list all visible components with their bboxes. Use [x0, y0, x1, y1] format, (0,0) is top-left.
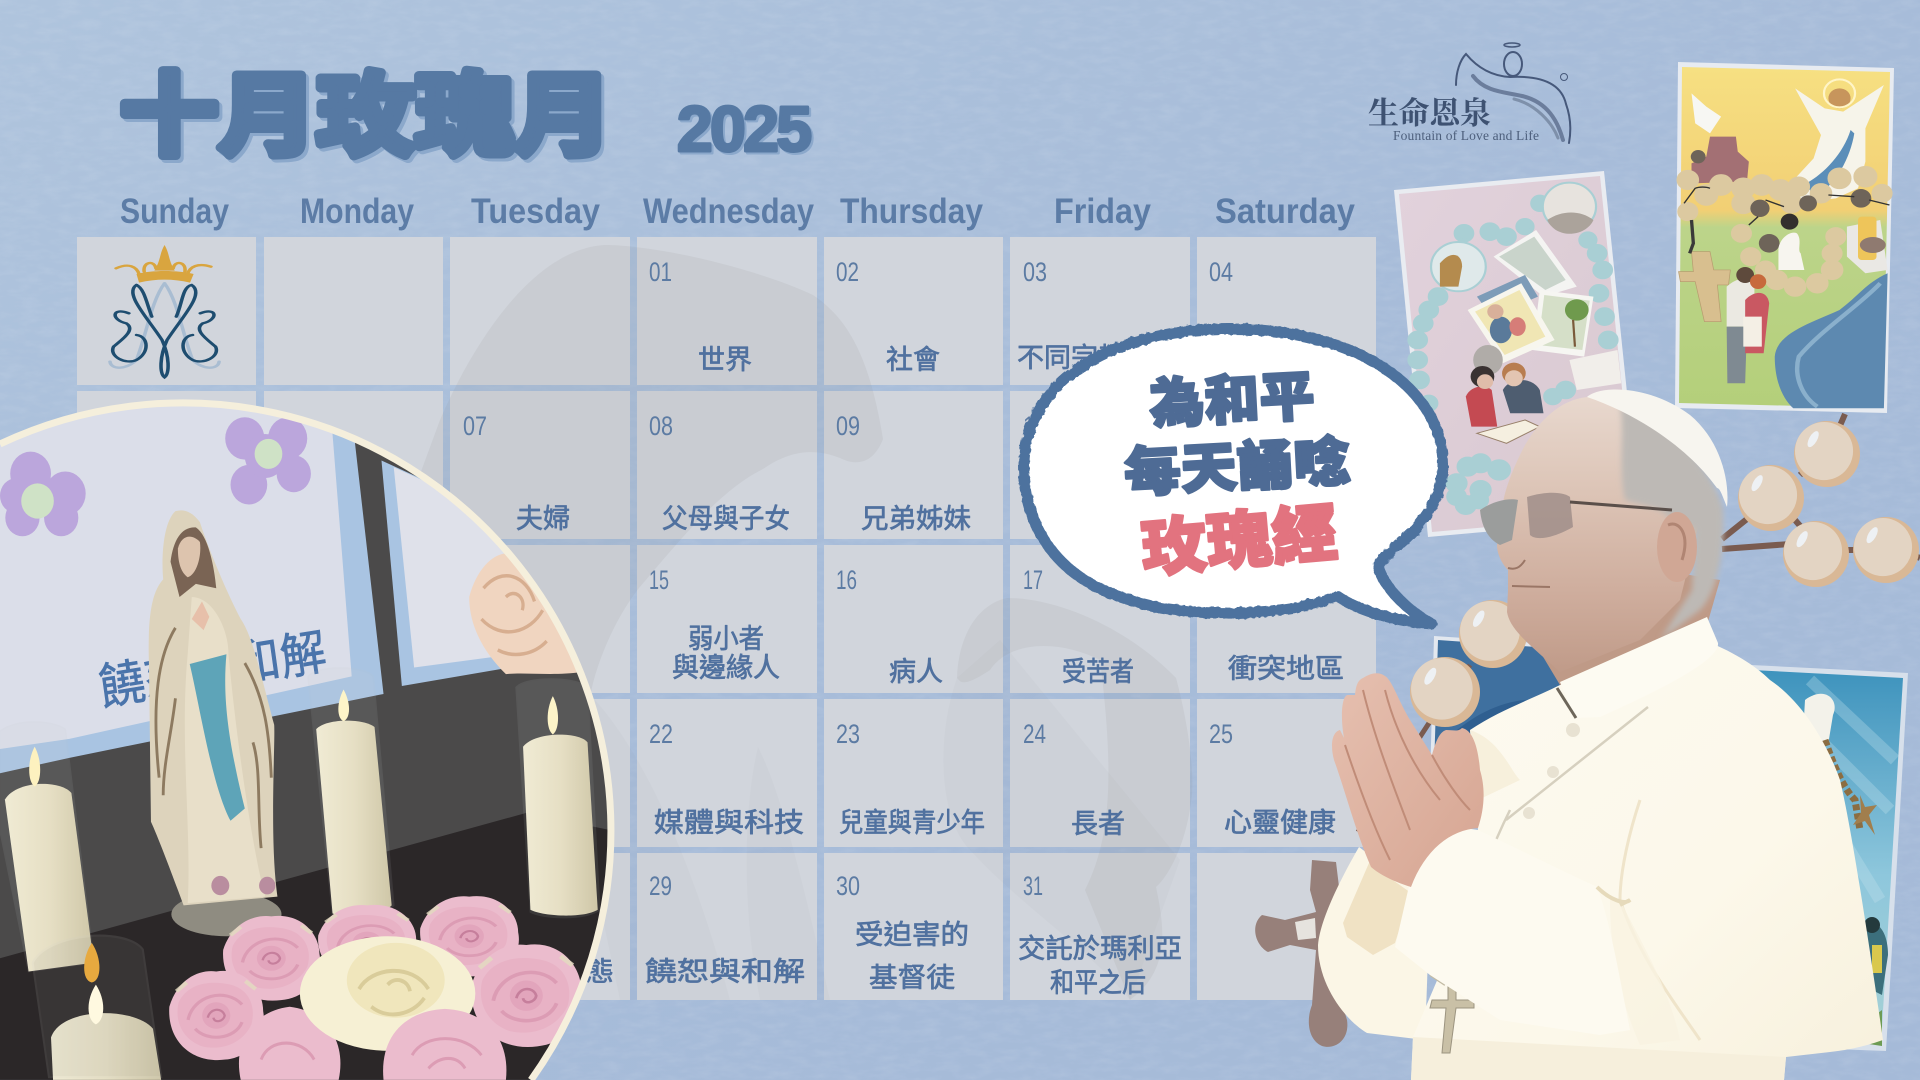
cell 15 弱小者與邊緣人: 與邊緣人 [672, 646, 780, 685]
watermark silhouette behind calendar [300, 245, 1192, 1000]
title: 十月玫瑰月: 十月玫瑰月 [123, 46, 615, 176]
weekday headers: Tuesday [471, 192, 600, 231]
weekday headers: Saturday [1215, 192, 1355, 231]
far sleeve [1318, 847, 1430, 1040]
cell 15 弱小者與邊緣人: 弱小者 [688, 617, 764, 656]
cell 25 心靈健康: 心靈健康 [1224, 801, 1336, 840]
cell 16 病人 [836, 565, 943, 689]
cell 15 弱小者與邊緣人 [649, 565, 780, 685]
pope figure praying [1318, 390, 1883, 1080]
hair [1620, 405, 1723, 640]
speech bubble: 為和平每天誦唸玫瑰經 [1024, 329, 1443, 624]
cell 16 病人: 病人 [889, 650, 943, 689]
cell 31 交託於瑪利亞和平之后: 交託於瑪利亞 [1018, 927, 1182, 966]
cell 23 兒童與青少年: 兒童與青少年 [839, 801, 985, 840]
cell 23 兒童與青少年 [836, 719, 985, 840]
cell 08 父母與子女: 父母與子女 [662, 497, 790, 536]
weekday headers: Sunday [120, 192, 229, 231]
cell 01 世界: 01 [649, 257, 672, 287]
cell 03 不同宗教: 不同宗教 [1017, 336, 1125, 375]
glass candle foreground [33, 936, 161, 1080]
statue of Our Lady [149, 510, 282, 936]
cell 02 社會 [836, 257, 940, 377]
cell 31 交託於瑪利亞和平之后 [1018, 871, 1182, 1000]
weekday headers: Thursday [840, 192, 983, 231]
rosary chain and crucifix near pope [1255, 600, 1527, 1047]
cell 30 受迫害的基督徒: 受迫害的 [855, 913, 969, 952]
cell 31 交託於瑪利亞和平之后: 31 [1023, 871, 1043, 901]
cell 29 饒恕與和解: 29 [649, 871, 672, 901]
cell 07 夫婦: 夫婦 [516, 497, 570, 536]
near sleeve [1395, 829, 1630, 1035]
year 2025: 2025 [677, 93, 812, 165]
weekday headers [120, 192, 1355, 231]
cell 04: 04 [1209, 257, 1233, 287]
rosary bead cluster top right [1722, 414, 1920, 587]
illustration: yellow and green mystery scene [1675, 62, 1894, 413]
glasses [1480, 493, 1672, 545]
cell 07 夫婦 [463, 411, 570, 536]
candle center [308, 668, 394, 918]
illustration: sky rosary and children [1728, 665, 1908, 1051]
title: 十月玫瑰月: 十月玫瑰月 [120, 43, 612, 173]
cell 25 心靈健康: 25 [1209, 719, 1233, 749]
weekday headers: Friday [1054, 192, 1151, 231]
photo circle: Marian statue with candles and roses [0, 390, 612, 1080]
weekday headers: Monday [300, 192, 414, 231]
roses bouquet [169, 896, 582, 1080]
cell 09 兄弟姊妹 [836, 411, 971, 536]
ear [1657, 512, 1697, 582]
cell 25 心靈健康 [1209, 719, 1336, 840]
cell 17 受苦者: 受苦者 [1062, 650, 1134, 689]
cell 08 父母與子女: 08 [649, 411, 673, 441]
cell 03 不同宗教: 03 [1023, 257, 1047, 287]
cell 30 受迫害的基督徒: 基督徒 [869, 956, 955, 995]
bubble line 1: 為和平 [1147, 352, 1316, 439]
cell 02 社會: 社會 [886, 338, 940, 377]
cell 29 饒恕與和解 [645, 871, 805, 989]
candle right [516, 679, 600, 917]
calendar dates and intentions [463, 257, 1344, 1000]
cell 24 長者: 24 [1023, 719, 1046, 749]
cell 衝突地區: 衝突地區 [1228, 647, 1344, 686]
year 2025: 2025 [679, 95, 814, 167]
cell 03 不同宗教 [1017, 257, 1125, 375]
praying hands [1332, 673, 1484, 887]
logo: Fountain of Love and Life: 生命恩泉 [1368, 88, 1491, 133]
cell 22 媒體與科技: 22 [649, 719, 673, 749]
face [1497, 397, 1700, 672]
cell 15 弱小者與邊緣人: 15 [649, 565, 669, 595]
cell 09 兄弟姊妹: 09 [836, 411, 860, 441]
peach rose [469, 553, 583, 674]
cell 24 長者 [1023, 719, 1125, 841]
weekday headers: Wednesday [643, 192, 814, 231]
cell 22 媒體與科技: 媒體與科技 [654, 801, 804, 840]
collar [1557, 617, 1718, 718]
bubble line 3: 玫瑰經 [1137, 483, 1340, 590]
cell 28 生態: 生態 [556, 950, 614, 989]
cell 01 世界 [649, 257, 752, 377]
neck [1533, 560, 1720, 685]
cell 22 媒體與科技 [649, 719, 804, 840]
cell 30 受迫害的基督徒 [836, 871, 969, 995]
cell 16 病人: 16 [836, 565, 857, 595]
calendar monogram: crowned M emblem [110, 245, 219, 377]
logo: Fountain of Love and Life: Fountain of Love and Life [1393, 128, 1539, 143]
logo: Fountain of Love and Life [1368, 43, 1570, 143]
pectoral cross [1430, 975, 1474, 1053]
cell 30 受迫害的基督徒: 30 [836, 871, 860, 901]
watermark lower veil [585, 640, 1180, 1000]
cell 29 饒恕與和解: 饒恕與和解 [645, 950, 805, 989]
cell 07 夫婦: 07 [463, 411, 487, 441]
handwritten paper label: 饒恕與和解 [94, 612, 330, 719]
cell 02 社會: 02 [836, 257, 859, 287]
candle left [0, 746, 92, 972]
cell 24 長者: 長者 [1071, 802, 1125, 841]
calendar grid cells [77, 237, 1376, 1000]
paper flowers [0, 417, 311, 536]
cell 17 受苦者: 17 [1023, 565, 1043, 595]
cell 17 受苦者 [1023, 565, 1134, 689]
cell 10: 10 [1023, 411, 1047, 441]
cell 01 世界: 世界 [698, 338, 752, 377]
cell 23 兒童與青少年: 23 [836, 719, 860, 749]
cape and robe [1411, 640, 1883, 1080]
photo wall [0, 390, 612, 1080]
cell 09 兄弟姊妹: 兄弟姊妹 [861, 497, 971, 536]
bubble line 2: 每天誦唸 [1122, 417, 1352, 508]
illustration: pink rosary with family photos [1394, 171, 1640, 537]
cell 31 交託於瑪利亞和平之后: 和平之后 [1050, 961, 1146, 1000]
cell 08 父母與子女 [649, 411, 790, 536]
zucchetto [1587, 390, 1728, 507]
illustration: dark blue scene behind pope [1430, 636, 1640, 800]
mouth and nose shading [1508, 560, 1550, 587]
